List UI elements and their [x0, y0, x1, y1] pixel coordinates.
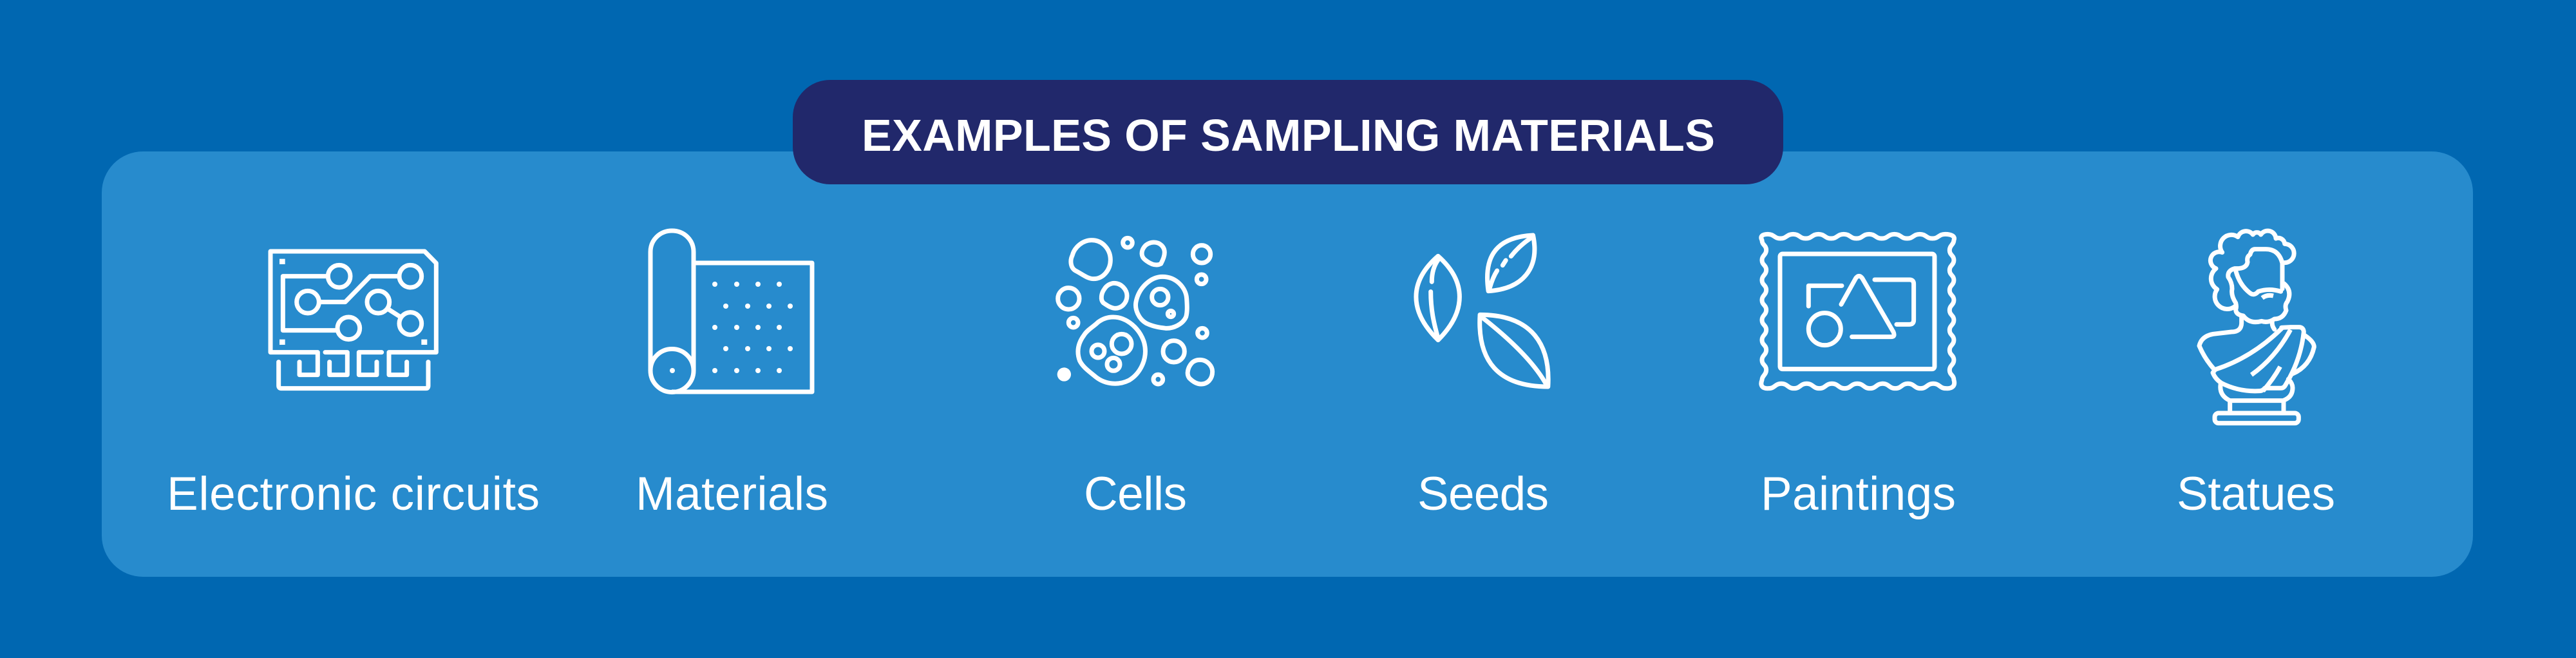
label: electronic circuits: Electronic circuits	[167, 468, 540, 520]
label: materials: Materials	[636, 468, 828, 520]
label: paintings: Paintings	[1761, 468, 1956, 520]
icon: statue	[2199, 231, 2314, 423]
label: cells: Cells	[1084, 468, 1187, 520]
icon: painting	[1761, 234, 1955, 389]
title: EXAMPLES OF SAMPLING MATERIALS	[862, 110, 1715, 160]
label: seeds: Seeds	[1417, 468, 1549, 520]
panel: sampling materials	[102, 151, 2473, 577]
label: statues: Statues	[2177, 468, 2335, 520]
title pill	[793, 80, 1783, 184]
icon: seeds	[1416, 235, 1548, 387]
icon: materials roll	[650, 231, 812, 392]
icon: electronic circuit	[270, 251, 436, 389]
icon: cells	[1057, 238, 1213, 384]
